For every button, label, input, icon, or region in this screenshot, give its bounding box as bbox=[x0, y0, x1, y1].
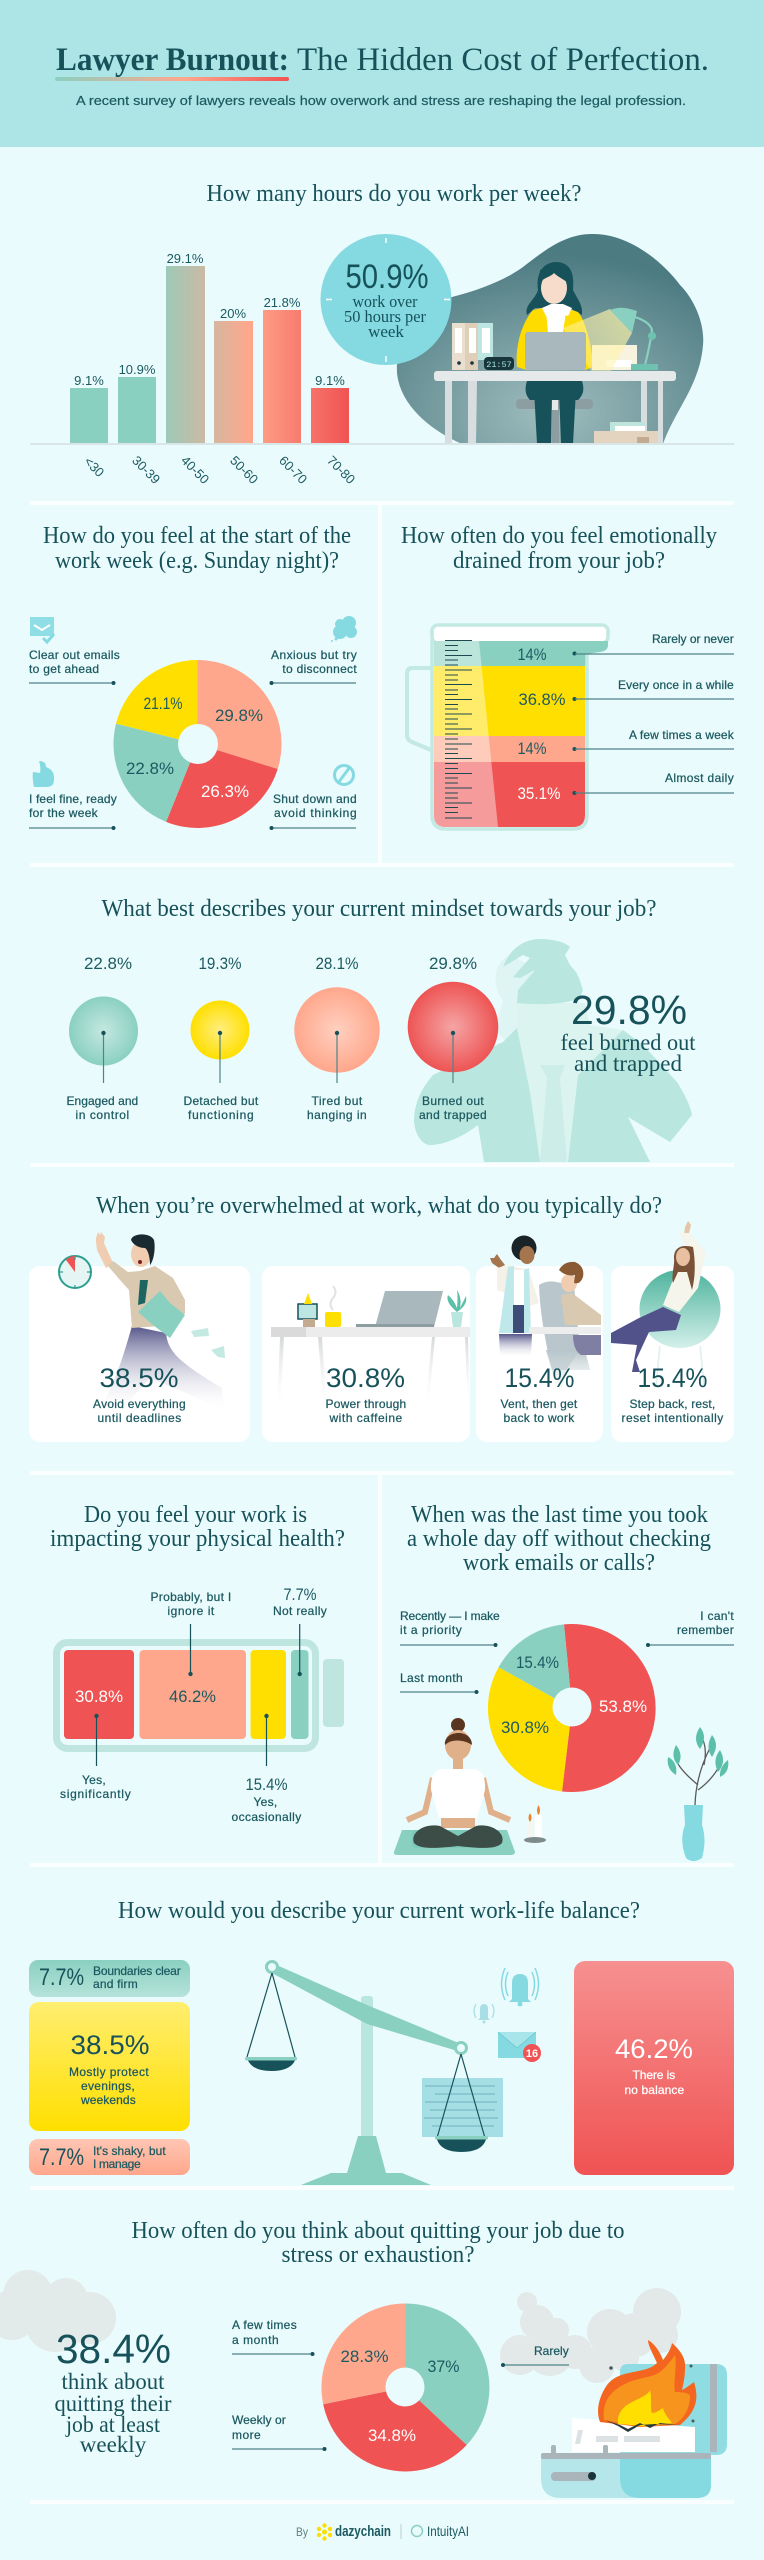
box: boundaries clear: Boundaries clear bbox=[93, 1964, 181, 1978]
heading: day off bbox=[407, 1502, 711, 1576]
label: feel fine: I feel fine, ready bbox=[29, 792, 117, 806]
divider bbox=[378, 503, 382, 865]
pie chart: day off: 53.8% bbox=[599, 1697, 647, 1716]
battery chart: physical health: significantly bbox=[60, 1787, 131, 1801]
jug chart: emotionally drained: Every once in a while bbox=[618, 678, 734, 692]
illustration: meditating woman bbox=[394, 1718, 546, 1855]
heading: physical health: impacting your physical health? bbox=[50, 1526, 345, 1552]
battery chart: physical health: Not really bbox=[273, 1604, 327, 1618]
label: clear out emails: to get ahead bbox=[29, 662, 99, 676]
bar chart: hours per week: <30 bbox=[81, 454, 107, 480]
label: clear out emails: Clear out emails bbox=[29, 648, 120, 662]
divider bbox=[30, 1471, 734, 1475]
label: anxious: Anxious but try bbox=[271, 648, 357, 662]
callout: 38.4%: weekly bbox=[80, 2432, 147, 2457]
battery chart: physical health: Yes, bbox=[253, 1795, 278, 1809]
illustration: vase and plant bbox=[668, 1727, 728, 1861]
card: vent: 15.4% bbox=[504, 1363, 574, 1393]
heading: day off: work emails or calls? bbox=[463, 1550, 655, 1576]
heading: work-life balance: How would you describe your current work-life balance? bbox=[118, 1898, 640, 1924]
heading: mindset: What best describes your current mindset towards your job? bbox=[102, 896, 656, 922]
icons: notifications: 16 bbox=[526, 2048, 538, 2060]
box: mostly protect: Mostly protect bbox=[69, 2065, 149, 2079]
jug chart: emotionally drained: 14% bbox=[518, 645, 546, 664]
divider bbox=[30, 501, 734, 505]
pie chart: quitting: 37% bbox=[428, 2357, 460, 2376]
bar chart: hours per week: 30-39 bbox=[129, 453, 163, 487]
battery chart: physical health bbox=[56, 1585, 344, 1824]
divider bbox=[30, 863, 734, 867]
callout: 29.8% burned out bbox=[560, 987, 696, 1076]
header band bbox=[0, 0, 764, 147]
battery chart: physical health: ignore it bbox=[168, 1604, 215, 1618]
callout: 29.8% burned out: and trapped bbox=[574, 1051, 682, 1076]
callout: 38.4% bbox=[54, 2326, 172, 2457]
heading: start of work week: work week (e.g. Sunday night)? bbox=[55, 548, 339, 574]
bar chart: hours per week: 10.9% bbox=[119, 362, 156, 377]
heading: physical health: Do you feel your work is bbox=[84, 1502, 307, 1528]
heading: quitting bbox=[132, 2218, 624, 2268]
bubble chart: mindset: 19.3% bbox=[198, 954, 242, 973]
jug chart: emotionally drained: A few times a week bbox=[629, 728, 735, 742]
card: avoid everything: Avoid everything bbox=[93, 1397, 186, 1411]
box: shaky bbox=[29, 2139, 190, 2175]
box: no balance bbox=[574, 1961, 734, 2175]
label: clear out emails bbox=[29, 617, 120, 685]
heading: day off: When was the last time you took bbox=[411, 1502, 708, 1528]
box: mostly protect: evenings, bbox=[81, 2079, 135, 2093]
footer: logos: dazychain bbox=[335, 2523, 391, 2540]
card: power through: Power through bbox=[326, 1397, 406, 1411]
heading: start of work week: How do you feel at the start of the bbox=[43, 523, 351, 549]
card: vent: back to work bbox=[504, 1411, 575, 1425]
bar chart: hours per week: 60-70 bbox=[276, 453, 310, 487]
heading: quitting: stress or exhaustion? bbox=[282, 2242, 474, 2268]
callout: clock 50.9%: 50.9% bbox=[346, 258, 428, 296]
box: no balance: 46.2% bbox=[615, 2034, 693, 2064]
callout: clock 50.9% bbox=[320, 234, 452, 365]
battery chart: physical health: 46.2% bbox=[169, 1687, 216, 1706]
bubble chart: mindset bbox=[66, 954, 498, 1122]
bubble chart: mindset: Detached but bbox=[184, 1094, 259, 1108]
battery chart: physical health: 30.8% bbox=[75, 1687, 123, 1706]
heading: overwhelmed: When you’re overwhelmed at work, what do you typically do? bbox=[96, 1193, 662, 1219]
card: vent bbox=[476, 1236, 603, 1442]
divider bbox=[30, 1863, 734, 1867]
label: rarely bbox=[501, 2344, 569, 2367]
pie chart: day off: 15.4% bbox=[516, 1653, 559, 1672]
bubble chart: mindset: Tired but bbox=[312, 1094, 363, 1108]
pie chart: quitting: 34.8% bbox=[368, 2426, 416, 2445]
heading: quitting: How often do you think about quitting your job due to bbox=[132, 2218, 624, 2244]
divider bbox=[378, 1473, 382, 1865]
footer: logos: By bbox=[296, 2525, 308, 2539]
pie chart: start of week: 22.8% bbox=[126, 759, 174, 778]
callout: 29.8% burned out: 29.8% bbox=[571, 987, 687, 1033]
bar chart: hours per week: 9.1% bbox=[74, 373, 104, 388]
bubble chart: mindset: in control bbox=[76, 1108, 130, 1122]
bubble chart: mindset: 29.8% bbox=[429, 954, 477, 973]
illustration: scale bbox=[245, 1962, 503, 2185]
box: shaky: I manage bbox=[93, 2157, 141, 2171]
heading: emotionally drained: drained from your job? bbox=[453, 548, 665, 574]
heading: start of work week bbox=[43, 523, 351, 574]
bubble chart: mindset: and trapped bbox=[419, 1108, 487, 1122]
callout: clock 50.9%: week bbox=[368, 322, 404, 341]
callout: 29.8% burned out: feel burned out bbox=[560, 1030, 696, 1055]
bar chart: hours per week: 50-60 bbox=[227, 453, 261, 487]
callout: 38.4%: think about bbox=[62, 2369, 165, 2394]
callout: 38.4%: quitting their bbox=[54, 2391, 172, 2416]
pie chart: start of week: 26.3% bbox=[201, 782, 249, 801]
pie chart: start of week bbox=[113, 660, 282, 828]
pie chart: quitting: more bbox=[232, 2428, 261, 2442]
card: power through bbox=[262, 1266, 470, 1442]
pie chart: day off: I can't bbox=[700, 1609, 734, 1623]
illustration: burning box bbox=[500, 2288, 727, 2498]
jug chart: emotionally drained: 36.8% bbox=[518, 690, 566, 709]
card: avoid everything: until deadlines bbox=[98, 1411, 182, 1425]
pie chart: start of week: 21.1% bbox=[144, 694, 182, 713]
box: boundaries clear: and firm bbox=[93, 1977, 138, 1991]
battery chart: physical health: occasionally bbox=[232, 1810, 302, 1824]
label: shut down bbox=[270, 766, 357, 830]
box: shaky: 7.7% bbox=[39, 2144, 84, 2171]
illustration: stressed man silhouette bbox=[414, 939, 692, 1162]
jug chart: emotionally drained: Almost daily bbox=[665, 771, 734, 785]
divider bbox=[30, 1163, 734, 1167]
bar chart: hours per week: 21.8% bbox=[264, 295, 301, 310]
card: power through: with caffeine bbox=[328, 1411, 403, 1425]
label: shut down: avoid thinking bbox=[274, 806, 357, 820]
label: anxious: to disconnect bbox=[282, 662, 357, 676]
box: mostly protect: weekends bbox=[80, 2093, 136, 2107]
pie chart: quitting: A few times bbox=[232, 2318, 297, 2332]
jug chart: emotionally drained: 14% bbox=[518, 739, 546, 758]
label: anxious bbox=[270, 616, 357, 685]
heading: emotionally drained: How often do you feel emotionally bbox=[401, 523, 717, 549]
callout: 38.4%: job at least bbox=[65, 2412, 161, 2437]
card: avoid everything: 38.5% bbox=[100, 1363, 178, 1393]
jug chart: emotionally drained: 35.1% bbox=[518, 784, 560, 803]
callout: clock 50.9%: work over bbox=[352, 292, 418, 311]
pie chart: day off: remember bbox=[677, 1623, 734, 1637]
heading: emotionally drained bbox=[401, 523, 717, 574]
callout: clock 50.9%: 50 hours per bbox=[344, 307, 426, 326]
label: rarely: Rarely bbox=[534, 2344, 569, 2358]
box: shaky: It's shaky, but bbox=[93, 2144, 166, 2158]
card: vent: Vent, then get bbox=[500, 1397, 578, 1411]
card: avoid everything bbox=[29, 1232, 250, 1442]
card: step back: reset intentionally bbox=[622, 1411, 724, 1425]
pie chart: start of week: 29.8% bbox=[215, 706, 263, 725]
card: step back: Step back, rest, bbox=[630, 1397, 716, 1411]
bar chart: hours per week: 29.1% bbox=[167, 251, 204, 266]
battery chart: physical health: 7.7% bbox=[284, 1585, 316, 1604]
pie chart: day off: Last month bbox=[400, 1671, 463, 1685]
pie chart: day off bbox=[400, 1609, 734, 1792]
label: shut down: Shut down and bbox=[273, 792, 357, 806]
box: mostly protect: 38.5% bbox=[70, 2030, 150, 2060]
pie chart: quitting bbox=[232, 2304, 489, 2471]
illustration: woman at desk bbox=[397, 234, 703, 444]
box: no balance: There is bbox=[632, 2068, 676, 2082]
label: feel fine: for the week bbox=[29, 806, 99, 820]
divider bbox=[30, 2186, 734, 2190]
bubble chart: mindset: Burned out bbox=[422, 1094, 484, 1108]
battery chart: physical health: Yes, bbox=[82, 1773, 106, 1787]
box: boundaries clear: 7.7% bbox=[39, 1964, 84, 1991]
title bbox=[55, 42, 709, 81]
illustration: woman at desk: 21:57 bbox=[486, 360, 512, 370]
heading: physical health bbox=[50, 1502, 345, 1552]
bar chart: hours per week bbox=[30, 251, 734, 487]
pie chart: quitting: a month bbox=[232, 2333, 279, 2347]
subtitle: A recent survey of lawyers reveals how overwork and stress are reshaping the legal profession. bbox=[76, 93, 686, 108]
bubble chart: mindset: functioning bbox=[188, 1108, 254, 1122]
pie chart: quitting: 28.3% bbox=[340, 2347, 388, 2366]
divider bbox=[30, 2500, 734, 2504]
jug chart: emotionally drained: Rarely or never bbox=[652, 632, 734, 646]
bubble chart: mindset: 28.1% bbox=[316, 954, 358, 973]
card: step back: 15.4% bbox=[638, 1363, 708, 1393]
callout: 38.4%: 38.4% bbox=[56, 2326, 171, 2372]
bubble chart: mindset: hanging in bbox=[307, 1108, 367, 1122]
title: The Hidden Cost of Perfection. bbox=[297, 42, 709, 78]
footer: logos bbox=[296, 2523, 469, 2541]
pie chart: quitting: Weekly or bbox=[232, 2413, 286, 2427]
pie chart: day off: Recently — I make bbox=[400, 1609, 500, 1623]
icons: notifications bbox=[474, 1968, 541, 2062]
pie chart: day off: it a priority bbox=[400, 1623, 462, 1637]
battery chart: physical health: Probably, but I bbox=[150, 1590, 232, 1604]
bubble chart: mindset: 22.8% bbox=[84, 954, 132, 973]
label: feel fine bbox=[29, 761, 117, 830]
box: boundaries clear bbox=[29, 1960, 190, 1997]
bubble chart: mindset: Engaged and bbox=[66, 1094, 138, 1108]
box: no balance: no balance bbox=[624, 2083, 685, 2097]
bar chart: hours per week: 40-50 bbox=[178, 453, 212, 487]
box: mostly protect bbox=[29, 2002, 190, 2131]
bar chart: hours per week: 9.1% bbox=[315, 373, 345, 388]
heading: hours per week: How many hours do you work per week? bbox=[206, 181, 582, 207]
bar chart: hours per week: 20% bbox=[220, 306, 246, 321]
title: Lawyer Burnout: bbox=[56, 42, 289, 78]
card: power through: 30.8% bbox=[326, 1363, 405, 1393]
jug chart: emotionally drained bbox=[407, 625, 735, 829]
heading: day off: a whole day off without checking bbox=[407, 1526, 711, 1552]
illustration: cloud bbox=[0, 2270, 116, 2352]
pie chart: day off: 30.8% bbox=[501, 1718, 549, 1737]
battery chart: physical health: 15.4% bbox=[246, 1775, 288, 1794]
bar chart: hours per week: 70-80 bbox=[324, 453, 358, 487]
card: step back bbox=[611, 1221, 734, 1442]
footer: logos: IntuityAI bbox=[427, 2523, 469, 2539]
